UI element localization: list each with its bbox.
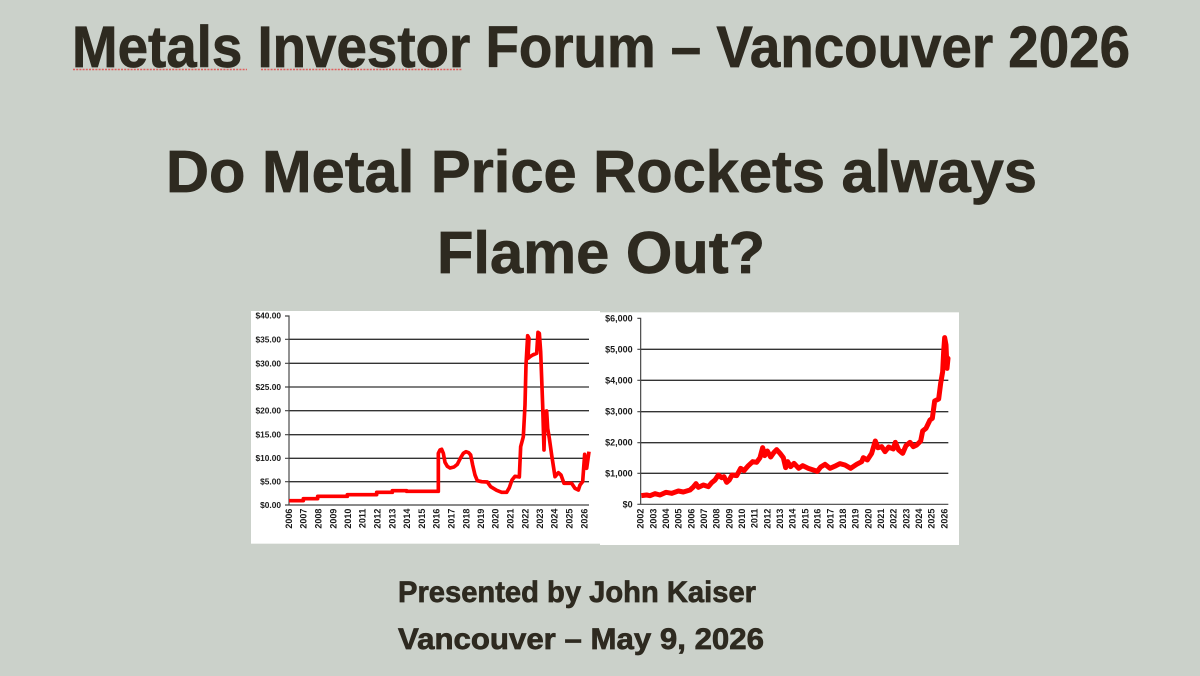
x axis labels: 2022: [520, 509, 530, 529]
y axis labels: $10.00: [256, 453, 281, 463]
x axis labels: 2003: [648, 509, 658, 529]
x axis labels: 2011: [358, 509, 368, 528]
title: Metals Investor Forum – Vancouver 2026: [72, 15, 1130, 80]
x axis labels: 2010: [737, 509, 747, 529]
y axis labels: $20.00: [256, 406, 281, 416]
x axis labels: [284, 509, 589, 529]
y axis labels: $35.00: [256, 334, 281, 344]
x axis labels: 2020: [491, 509, 501, 529]
y axis labels: [605, 313, 633, 509]
x axis labels: 2022: [889, 509, 899, 529]
x axis labels: 2006: [686, 509, 696, 529]
x axis labels: 2008: [314, 509, 324, 529]
x axis labels: 2021: [876, 509, 886, 529]
x axis labels: 2019: [851, 509, 861, 529]
y axis labels: $4,000: [605, 375, 633, 385]
x axis labels: 2026: [939, 509, 949, 529]
x axis labels: 2011: [750, 509, 760, 528]
x axis labels: 2013: [387, 509, 397, 529]
y axis labels: $6,000: [605, 313, 633, 323]
x axis labels: 2024: [550, 509, 560, 529]
y axis labels: $15.00: [256, 429, 281, 439]
x axis labels: 2023: [535, 509, 545, 529]
price line: [641, 338, 948, 496]
x axis labels: 2019: [476, 509, 486, 529]
y axis labels: $5,000: [605, 344, 633, 354]
x axis labels: 2005: [674, 509, 684, 529]
x axis labels: 2015: [417, 509, 427, 529]
x axis labels: 2017: [825, 509, 835, 529]
x axis labels: 2025: [927, 509, 937, 529]
x axis labels: [636, 509, 949, 529]
y axis labels: $0.00: [260, 500, 281, 510]
y axis labels: $25.00: [256, 382, 281, 392]
location and date: Vancouver – May 9, 2026: [398, 623, 764, 656]
x axis labels: 2004: [661, 509, 671, 529]
x axis labels: 2007: [299, 509, 309, 529]
y axis labels: [256, 311, 281, 510]
x axis labels: 2009: [724, 509, 734, 529]
subtitle: Flame Out?: [437, 220, 765, 286]
chart: price line 2002-2026: [600, 312, 959, 545]
y axis labels: $3,000: [605, 407, 633, 417]
x axis labels: 2007: [699, 509, 709, 529]
x axis labels: 2009: [328, 509, 338, 529]
y axis labels: $1,000: [605, 468, 633, 478]
x axis labels: 2018: [838, 509, 848, 529]
chart: price line 2006-2026: [251, 311, 600, 544]
presenter line: Presented by John Kaiser: [398, 576, 756, 609]
x axis labels: 2008: [712, 509, 722, 529]
x axis labels: 2002: [636, 509, 646, 529]
x axis labels: 2016: [432, 509, 442, 529]
x axis labels: 2018: [461, 509, 471, 529]
x axis labels: 2012: [762, 509, 772, 529]
x axis labels: 2012: [373, 509, 383, 529]
x axis labels: 2014: [402, 509, 412, 529]
x axis labels: 2015: [800, 509, 810, 529]
x axis labels: 2016: [813, 509, 823, 529]
price line: [289, 332, 589, 501]
y axis labels: $30.00: [256, 358, 281, 368]
y axis labels: $0: [623, 499, 633, 509]
x axis labels: 2025: [565, 509, 575, 529]
y axis labels: $5.00: [260, 477, 281, 487]
subtitle: [166, 139, 1037, 286]
x axis labels: 2026: [579, 509, 589, 529]
y axis labels: $2,000: [605, 438, 633, 448]
x axis labels: 2014: [788, 509, 798, 529]
x axis labels: 2013: [775, 509, 785, 529]
subtitle: Do Metal Price Rockets always: [166, 139, 1037, 205]
x axis labels: 2006: [284, 509, 294, 529]
x axis labels: 2017: [446, 509, 456, 529]
x axis labels: 2021: [505, 509, 515, 529]
x axis labels: 2023: [901, 509, 911, 529]
x axis labels: 2024: [914, 509, 924, 529]
x axis labels: 2010: [343, 509, 353, 529]
x axis labels: 2020: [863, 509, 873, 529]
y axis labels: $40.00: [256, 311, 281, 321]
